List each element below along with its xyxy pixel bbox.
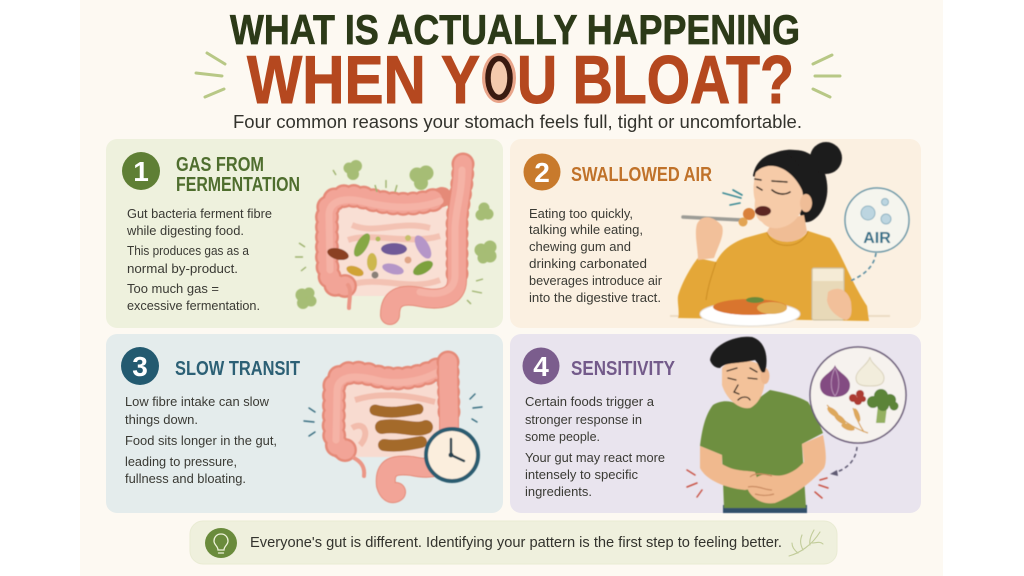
text block 2 [529, 206, 663, 305]
icon: sprig [789, 530, 823, 556]
title: WHEN Y [247, 42, 480, 118]
panel: sensitivity [510, 334, 921, 513]
sweater [678, 231, 869, 321]
text block 4: Your gut may react more [525, 450, 665, 465]
heading 3: SLOW TRANSIT [175, 358, 300, 380]
text block 1: excessive fermentation. [127, 298, 260, 313]
text block 4 [525, 394, 665, 499]
onion [820, 365, 850, 397]
illustration: colon with stool and clock [304, 362, 482, 493]
text block 4: intensely to specific [525, 467, 638, 482]
broccoli [876, 405, 887, 423]
text block 1: This produces gas as a [127, 243, 250, 258]
stool [375, 409, 426, 446]
air bubble callout [845, 188, 909, 252]
footer callout [190, 521, 837, 564]
food circle callout [810, 347, 906, 443]
badge 4 [522, 348, 560, 384]
bite of food [743, 208, 755, 220]
panel: gas from fermentation [106, 139, 503, 328]
decorative rays [196, 53, 840, 97]
arms [700, 446, 760, 490]
shirt [700, 390, 823, 508]
text block 3: Low fibre intake can slow [125, 394, 269, 409]
badge 2: 2 [534, 157, 550, 188]
text block 3: fullness and bloating. [125, 471, 246, 486]
wheat [827, 405, 868, 433]
pain marks [687, 470, 828, 498]
text block 2: talking while eating, [529, 222, 643, 237]
text block 3: leading to pressure, [125, 454, 237, 469]
text block 3: things down. [125, 412, 198, 427]
text block 1: Gut bacteria ferment fibre [127, 206, 272, 221]
plate [700, 302, 800, 326]
text block 4: ingredients. [525, 484, 592, 499]
text block 1: while digesting food. [126, 223, 244, 238]
text block 1: normal by-product. [127, 261, 238, 276]
heading 1: GAS FROM [176, 154, 264, 176]
fork [683, 217, 742, 220]
neck [767, 215, 807, 242]
fringe [753, 152, 803, 190]
arrow [834, 447, 857, 473]
hand on glass [827, 289, 851, 320]
badge 3 [121, 347, 159, 385]
heading 1 [176, 154, 300, 196]
mouth [755, 206, 771, 216]
hair [710, 337, 767, 373]
text block 3 [125, 394, 277, 486]
footer message: Everyone's gut is different. Identifying your pattern is the first step to feeling better. [250, 535, 782, 551]
heading 2: SWALLOWED AIR [571, 164, 712, 186]
gas clouds [296, 160, 496, 308]
head [722, 360, 765, 408]
heading 1: FERMENTATION [176, 174, 300, 196]
illustration: man holding stomach [687, 337, 906, 513]
clock [426, 429, 478, 481]
glass [812, 268, 844, 320]
text block 4: Certain foods trigger a [525, 394, 655, 409]
illustration: woman eating [670, 142, 909, 326]
badge 1 [122, 152, 160, 190]
face [754, 164, 803, 228]
air bubble callout: AIR [863, 230, 891, 247]
garlic [856, 357, 884, 386]
hand [696, 217, 723, 260]
berries [849, 390, 866, 405]
heading 4: SENSITIVITY [571, 358, 676, 380]
title: U BLOAT? [517, 42, 794, 118]
hair back [753, 150, 827, 222]
text block 1 [126, 206, 272, 313]
badge 1: 1 [133, 156, 149, 187]
text block 2: Eating too quickly, [529, 206, 633, 221]
icon: light bulb [205, 528, 237, 558]
subtitle: Four common reasons your stomach feels full, tight or uncomfortable. [233, 112, 802, 132]
text block 4: some people. [525, 429, 600, 444]
text block 3: Food sits longer in the gut, [125, 433, 277, 448]
badge 2 [524, 154, 560, 190]
text block 2: beverages introduce air [529, 273, 663, 288]
illustration: colon with bacteria [295, 160, 496, 315]
table shadow [670, 315, 890, 317]
title: WHAT IS ACTUALLY HAPPENING [230, 6, 800, 53]
text block 2: drinking carbonated [529, 256, 647, 271]
bacteria [326, 231, 435, 278]
text block 2: chewing gum and [529, 239, 631, 254]
text block 2: into the digestive tract. [529, 290, 661, 305]
badge 3: 3 [132, 351, 148, 382]
panel: swallowed air [510, 139, 921, 328]
jeans [723, 505, 807, 513]
text block 4: stronger response in [525, 412, 642, 427]
text block 1: Too much gas = [127, 281, 219, 296]
title [230, 6, 800, 118]
badge 4: 4 [533, 351, 549, 382]
panel: slow transit [106, 334, 503, 513]
